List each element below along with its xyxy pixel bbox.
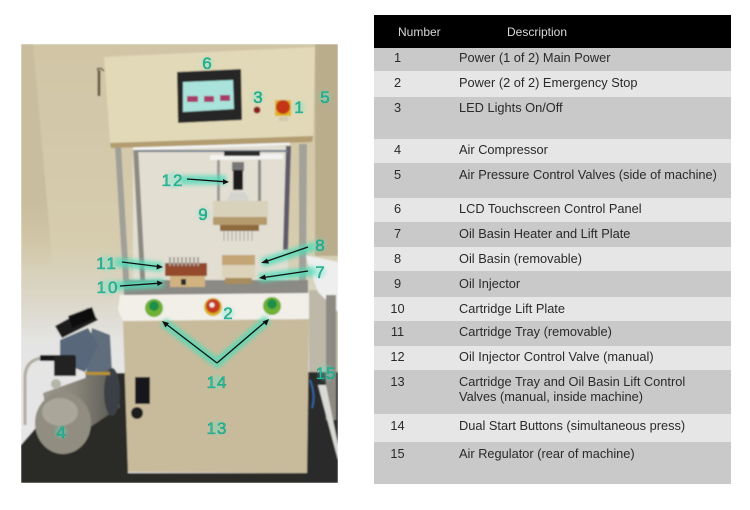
arrow: 7: [259, 271, 308, 280]
row 1: Power (1 of 2) Main Power: [459, 50, 610, 65]
label 5: 5: [320, 88, 330, 107]
label 8: 8: [315, 236, 325, 255]
row 1: 1: [394, 50, 401, 65]
wall: [21, 44, 338, 483]
table header: Description: [507, 25, 567, 39]
label 13: 13: [207, 419, 227, 438]
row 8: [374, 247, 731, 271]
label 7: 7: [315, 263, 325, 282]
air compressor: [25, 307, 120, 454]
row 7: 7: [394, 226, 401, 241]
oil basin and heater: [222, 255, 255, 284]
row 5: [374, 163, 731, 198]
label 3: 3: [253, 88, 263, 107]
row 3: 3: [394, 100, 401, 115]
row 14: [374, 414, 731, 442]
row 6: LCD Touchscreen Control Panel: [459, 201, 642, 216]
label 11: 11: [96, 254, 118, 273]
table header: Number: [398, 25, 441, 39]
row 12: Oil Injector Control Valve (manual): [459, 349, 654, 364]
row 4: [374, 139, 731, 163]
touchscreen: [177, 69, 242, 123]
row 3: LED Lights On/Off: [459, 100, 563, 115]
row 13: 13: [390, 374, 405, 389]
row 11: [374, 321, 731, 346]
number labels: [56, 54, 336, 442]
label glow: [55, 57, 334, 438]
row 2: 2: [394, 75, 401, 90]
row 13: Valves (manual, inside machine): [459, 389, 643, 404]
row 10: [374, 297, 731, 321]
row 11: Cartridge Tray (removable): [459, 324, 612, 339]
row 9: Oil Injector: [459, 276, 520, 291]
row 12: [374, 346, 731, 370]
top cabinet: [97, 47, 315, 148]
row 11: 11: [391, 324, 404, 339]
LED switch: [254, 106, 260, 114]
parts table: [374, 15, 731, 484]
row 6: 6: [394, 201, 401, 216]
arrow: 10: [120, 280, 163, 286]
main power switch: [275, 100, 291, 121]
row 13: [374, 370, 731, 414]
row 14: Dual Start Buttons (simultaneous press): [459, 418, 685, 433]
row 5: 5: [394, 167, 401, 182]
door knob: [131, 407, 143, 419]
label 6: 6: [202, 54, 212, 73]
door handle: [135, 377, 150, 404]
label 1: 1: [294, 98, 304, 117]
LED bar: [133, 141, 290, 150]
row 13: Cartridge Tray and Oil Basin Lift Control: [459, 374, 685, 389]
label 14: 14: [207, 373, 227, 392]
row 8: 8: [394, 251, 401, 266]
table header: [374, 15, 731, 48]
row 3: [374, 97, 731, 139]
teal glow behind arrows: [115, 180, 315, 363]
row 2: [374, 71, 731, 97]
row 2: Power (2 of 2) Emergency Stop: [459, 75, 638, 90]
label 9: 9: [198, 205, 208, 224]
lower cabinet: [118, 293, 309, 473]
row 12: 12: [390, 349, 405, 364]
frame posts: [115, 144, 307, 295]
arrow: 8: [261, 247, 308, 264]
row 15: [374, 442, 731, 484]
table top: [124, 280, 308, 296]
emergency stop: [204, 298, 222, 316]
label 4: 4: [56, 423, 66, 442]
row 10: 10: [390, 301, 405, 316]
start button left: [145, 299, 163, 317]
row 6: [374, 198, 731, 222]
row 7: Oil Basin Heater and Lift Plate: [459, 226, 630, 241]
label 15: 15: [316, 364, 336, 383]
row 5: Air Pressure Control Valves (side of machine): [459, 167, 717, 182]
injector assembly: [210, 151, 283, 241]
arrow: 12: [187, 179, 229, 184]
photo scene: [21, 44, 338, 483]
side table: [305, 255, 338, 460]
label 2: 2: [223, 304, 233, 323]
row 9: 9: [394, 276, 401, 291]
label 10: 10: [97, 278, 119, 297]
row 15: Air Regulator (rear of machine): [459, 446, 635, 461]
row 4: 4: [394, 142, 401, 157]
cartridge tray and lift plate: [165, 257, 207, 287]
arrow: 11: [122, 262, 163, 270]
row 1: [374, 48, 731, 71]
row 9: [374, 271, 731, 297]
annotated machine photo: [21, 44, 338, 483]
label 12: 12: [162, 171, 184, 190]
row 7: [374, 222, 731, 247]
row 4: Air Compressor: [459, 142, 548, 157]
start button right: [263, 297, 281, 315]
row 15: 15: [390, 446, 405, 461]
row 10: Cartridge Lift Plate: [459, 301, 565, 316]
row 14: 14: [390, 418, 405, 433]
arrows: 14: [162, 319, 269, 363]
floor: [21, 373, 128, 483]
row 8: Oil Basin (removable): [459, 251, 582, 266]
